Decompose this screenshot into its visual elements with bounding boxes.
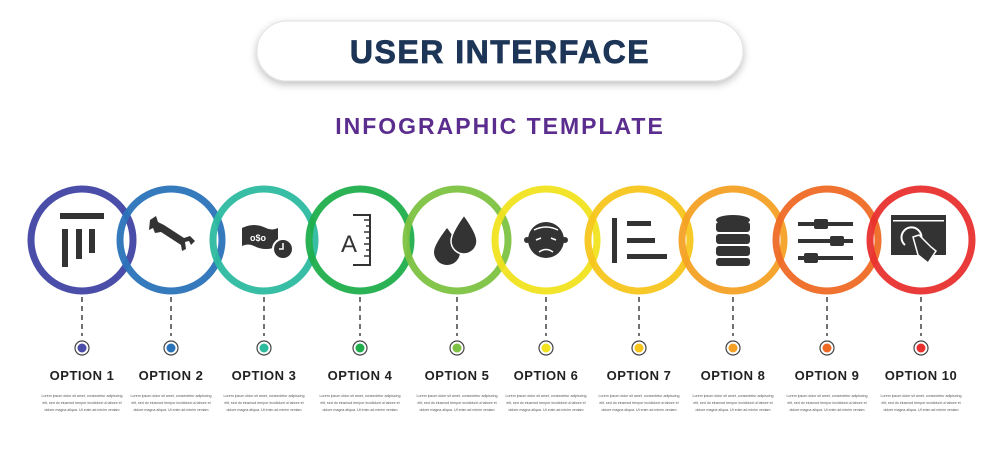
icon 10: touch screen [891, 215, 946, 263]
description texts: Lorem ipsum dolor sit amet, consectetur adipiscing [42, 394, 122, 398]
icon 3: money time: o$o [250, 233, 266, 243]
description texts: elit, sed do eiusmod tempor incididunt ut labore et [506, 401, 586, 405]
connectors [82, 297, 921, 336]
description texts: dolore magna aliqua. Ut enim ad minim veniam [226, 408, 302, 412]
description texts [42, 394, 961, 412]
option labels: OPTION 5 [425, 368, 489, 383]
option labels: OPTION 1 [50, 368, 114, 383]
description texts: Lorem ipsum dolor sit amet, consectetur adipiscing [693, 394, 773, 398]
description texts: elit, sed do eiusmod tempor incididunt ut labore et [42, 401, 122, 405]
option labels: OPTION 6 [514, 368, 578, 383]
circles row [31, 189, 972, 291]
icon 7: align bars [612, 218, 667, 263]
description texts: dolore magna aliqua. Ut enim ad minim veniam [789, 408, 865, 412]
option labels: OPTION 7 [607, 368, 671, 383]
description texts: dolore magna aliqua. Ut enim ad minim veniam [508, 408, 584, 412]
description texts: elit, sed do eiusmod tempor incididunt ut labore et [693, 401, 773, 405]
description texts: dolore magna aliqua. Ut enim ad minim veniam [44, 408, 120, 412]
description texts: dolore magna aliqua. Ut enim ad minim veniam [322, 408, 398, 412]
description texts: elit, sed do eiusmod tempor incididunt ut labore et [787, 401, 867, 405]
icon 6: sad face [524, 222, 568, 258]
description texts: Lorem ipsum dolor sit amet, consectetur adipiscing [417, 394, 497, 398]
option labels: OPTION 2 [139, 368, 203, 383]
description texts: elit, sed do eiusmod tempor incididunt ut labore et [224, 401, 304, 405]
description texts: Lorem ipsum dolor sit amet, consectetur adipiscing [787, 394, 867, 398]
subtitle: INFOGRAPHIC TEMPLATE [335, 113, 665, 139]
description texts: Lorem ipsum dolor sit amet, consectetur adipiscing [320, 394, 400, 398]
description texts: Lorem ipsum dolor sit amet, consectetur adipiscing [881, 394, 961, 398]
description texts: Lorem ipsum dolor sit amet, consectetur adipiscing [599, 394, 679, 398]
icon 3: money time [242, 225, 293, 259]
option labels: OPTION 3 [232, 368, 296, 383]
description texts: elit, sed do eiusmod tempor incididunt ut labore et [131, 401, 211, 405]
description texts: Lorem ipsum dolor sit amet, consectetur adipiscing [131, 394, 211, 398]
description texts: dolore magna aliqua. Ut enim ad minim veniam [133, 408, 209, 412]
icon 9: sliders [798, 219, 853, 263]
option labels: OPTION 9 [795, 368, 859, 383]
icon 1: columns [60, 213, 104, 267]
description texts: dolore magna aliqua. Ut enim ad minim veniam [883, 408, 959, 412]
option labels: OPTION 10 [885, 368, 957, 383]
description texts: Lorem ipsum dolor sit amet, consectetur adipiscing [506, 394, 586, 398]
description texts: elit, sed do eiusmod tempor incididunt ut labore et [320, 401, 400, 405]
icon 8: database [716, 215, 750, 266]
option labels [50, 368, 957, 383]
icon 2: wrench [149, 216, 195, 251]
icon 5: drops [434, 215, 477, 265]
description texts: dolore magna aliqua. Ut enim ad minim veniam [419, 408, 495, 412]
description texts: Lorem ipsum dolor sit amet, consectetur adipiscing [224, 394, 304, 398]
option labels: OPTION 4 [328, 368, 393, 383]
description texts: elit, sed do eiusmod tempor incididunt ut labore et [599, 401, 679, 405]
description texts: elit, sed do eiusmod tempor incididunt ut labore et [881, 401, 961, 405]
description texts: dolore magna aliqua. Ut enim ad minim veniam [601, 408, 677, 412]
title pill [257, 21, 743, 81]
icon 4: text size: A [341, 231, 357, 258]
title pill: USER INTERFACE [350, 34, 650, 70]
dots [75, 341, 928, 355]
icon 4: text size [341, 215, 370, 265]
description texts: elit, sed do eiusmod tempor incididunt ut labore et [417, 401, 497, 405]
description texts: dolore magna aliqua. Ut enim ad minim veniam [695, 408, 771, 412]
option labels: OPTION 8 [701, 368, 765, 383]
